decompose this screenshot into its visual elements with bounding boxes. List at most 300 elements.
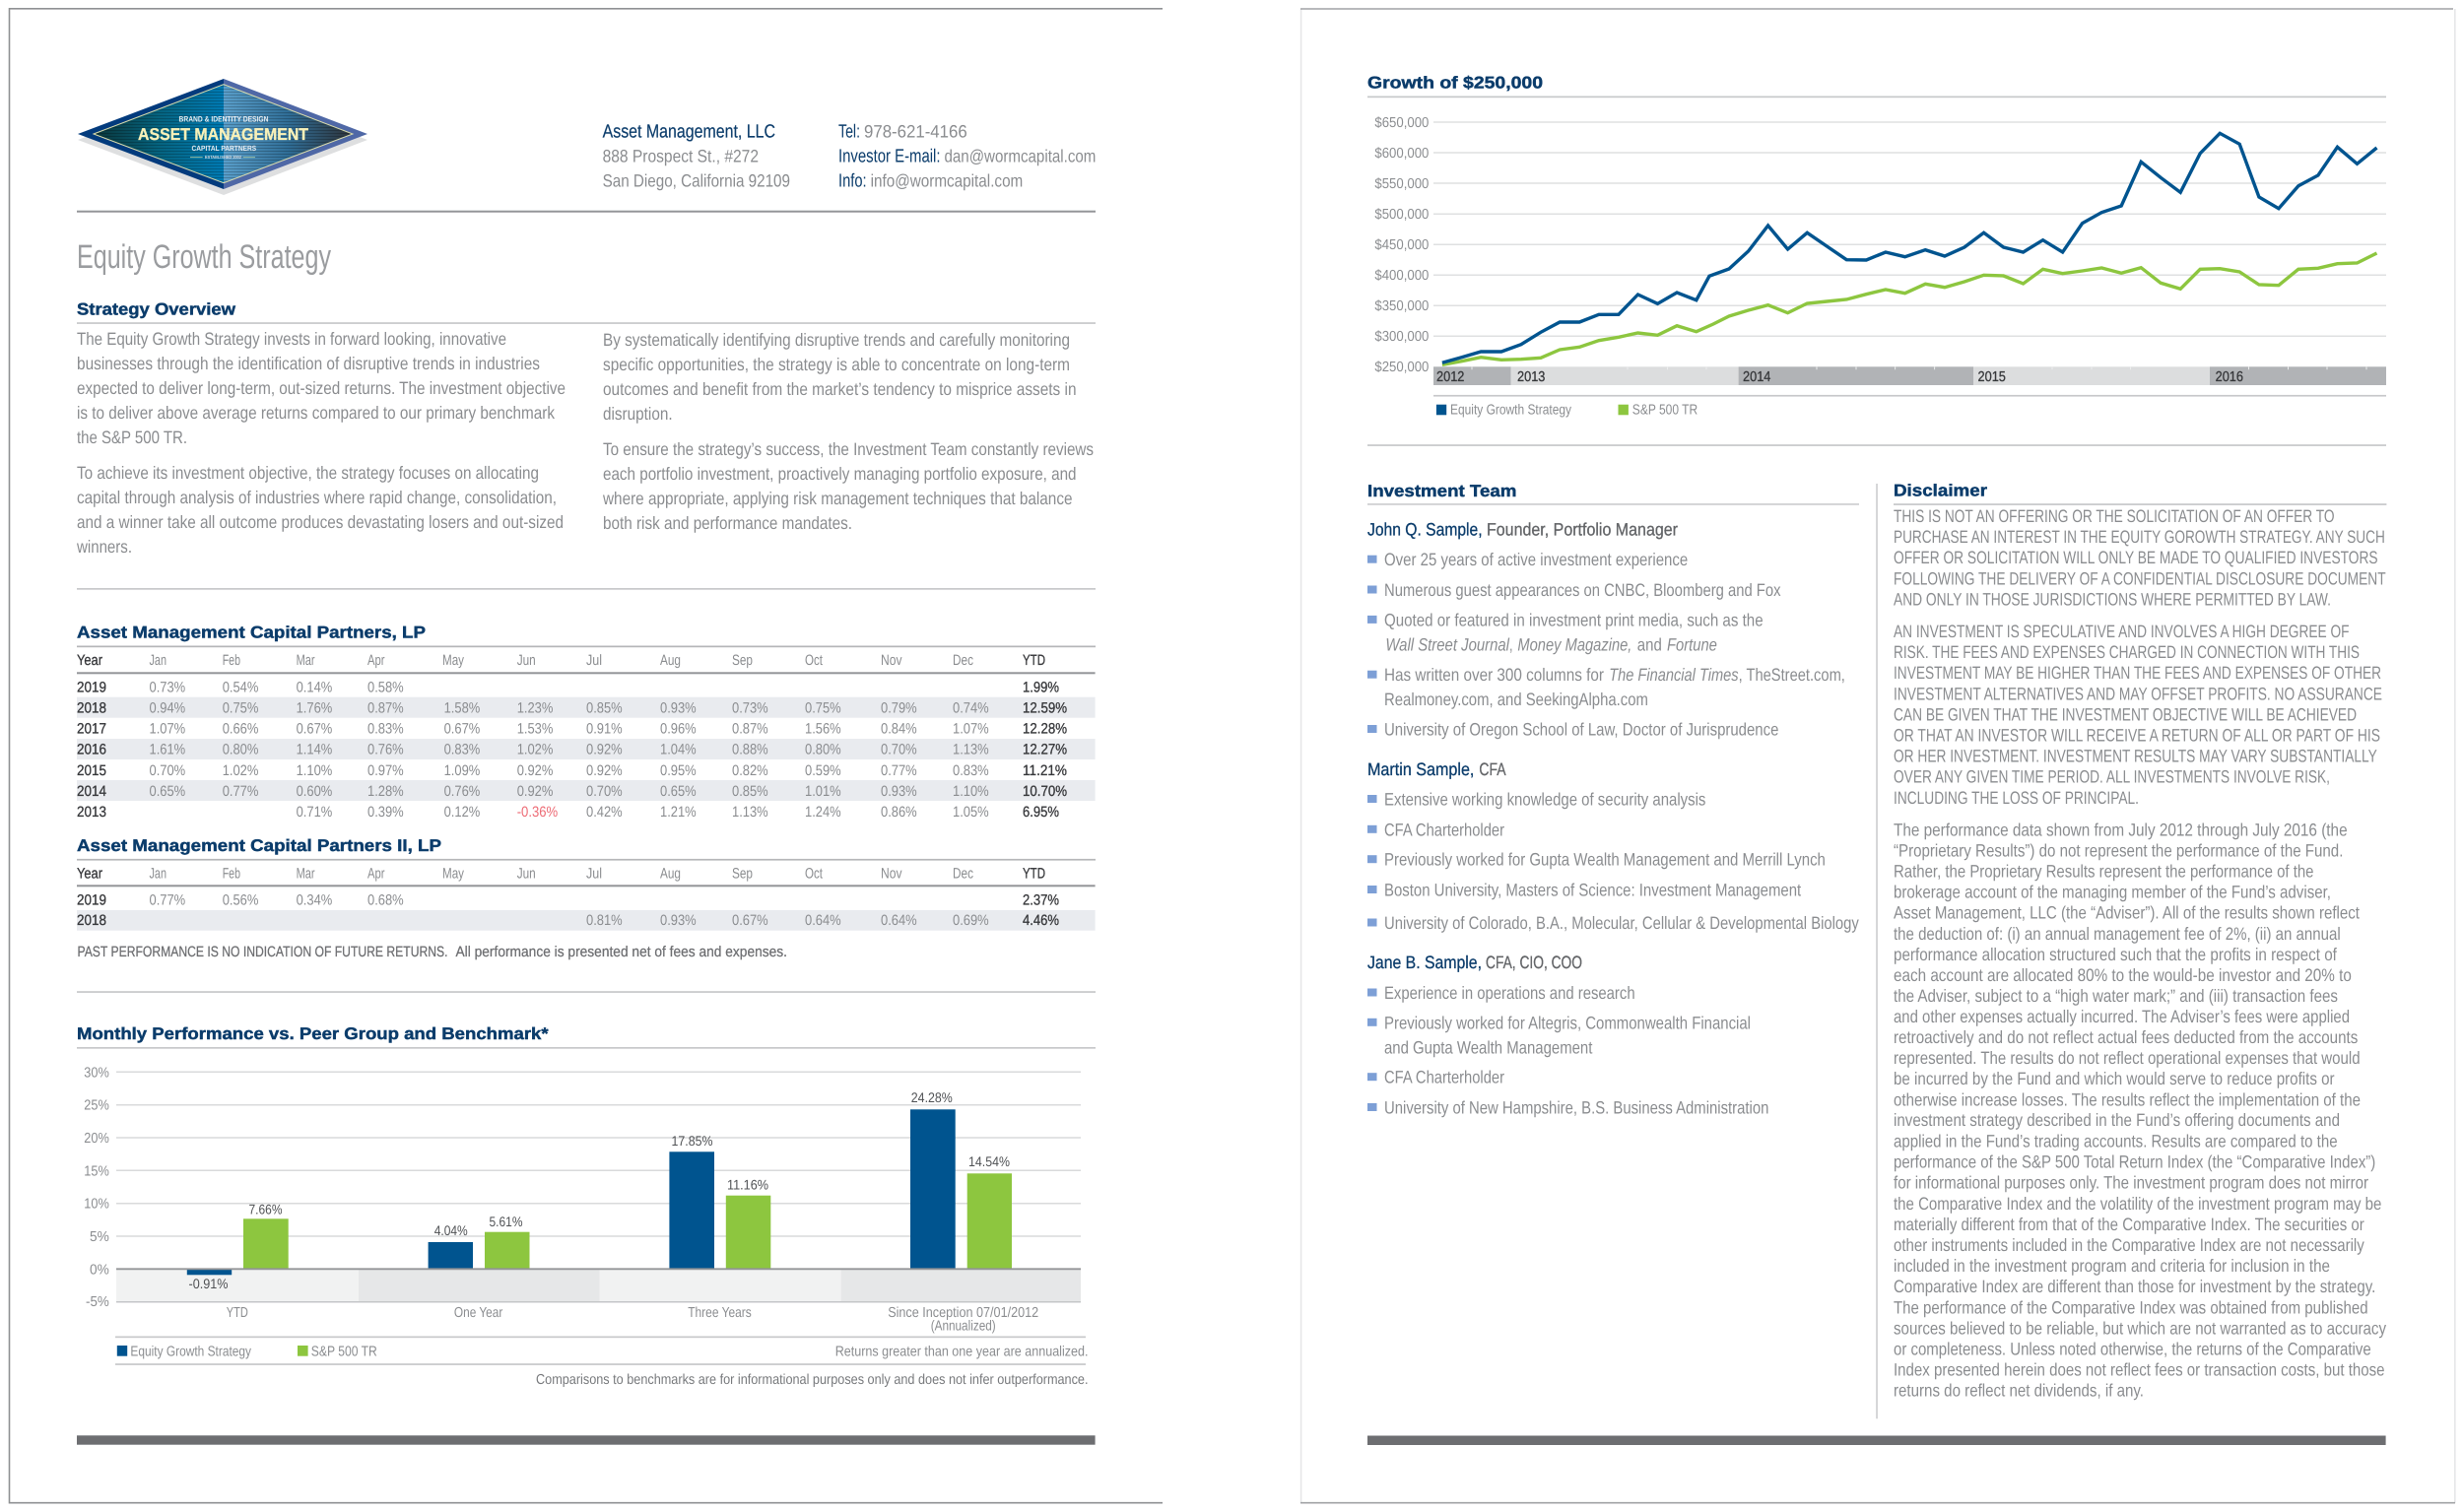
bars: one year: 4.04%	[434, 1222, 468, 1238]
row 2014: 0.70%	[586, 783, 623, 800]
note: benchmark comparison: Comparisons to benchmarks are for informational purposes only and does not infer outperformance.	[536, 1372, 1088, 1388]
text: overview left column: The Equity Growth Strategy invests in forward looking, innovative	[77, 329, 506, 349]
panel: monthly performance chart	[77, 1024, 1096, 1388]
team member: John Q. Sample: Over 25 years of active investment experience	[1384, 550, 1688, 569]
row 2019: 0.56%	[223, 891, 258, 908]
row 2014: 0.76%	[444, 783, 480, 800]
row 2017: 0.83%	[367, 721, 404, 737]
row 2013: 1.24%	[805, 804, 841, 821]
row 2018: 0.93%	[660, 699, 697, 716]
note: past performance: PAST PERFORMANCE IS NO INDICATION OF FUTURE RETURNS.	[77, 944, 447, 960]
row 2019: 2.37%	[1023, 891, 1059, 908]
category labels: YTD	[227, 1305, 248, 1321]
row 2014: 0.77%	[223, 783, 258, 800]
text: performance data notice: Comparative Index are different than those for investment by the strategy.	[1894, 1277, 2375, 1296]
row 2018: 2018	[77, 912, 106, 929]
text: performance data notice: performance allocation structured such that the profits in respect of	[1894, 945, 2338, 964]
row 2014: 0.92%	[517, 783, 553, 800]
row 2015: 0.92%	[517, 762, 553, 779]
row 2019	[77, 891, 1059, 908]
text: overview right column: where appropriate, applying risk management techniques that balance	[602, 489, 1072, 508]
row 2016: 1.04%	[660, 741, 697, 758]
team member: Jane B. Sample: and Gupta Wealth Management	[1384, 1038, 1592, 1058]
row 2018: 1.76%	[297, 699, 332, 716]
y axis labels: $500,000	[1374, 207, 1429, 223]
bars: since inception: 14.54%	[968, 1153, 1010, 1169]
text: performance data notice: brokerage account of the managing member of the Fund’s adviser,	[1894, 883, 2331, 902]
category labels	[227, 1305, 1038, 1334]
table header row: Mar	[297, 865, 315, 883]
team member: John Q. Sample: Numerous guest appearances on CNBC, Bloomberg and Fox	[1384, 580, 1781, 600]
table header row: May	[442, 652, 464, 669]
team member: John Q. Sample: Money Magazine,	[1517, 634, 1631, 654]
text: performance data notice: included in the investment program and criteria for inclusion in the	[1894, 1256, 2330, 1276]
team member: Martin Sample: CFA	[1479, 759, 1506, 779]
bars: since inception	[910, 1089, 1012, 1269]
row 2015: 0.97%	[367, 762, 404, 779]
text: performance data notice: the deduction of: (i) an annual management fee of 2%, (ii) an annual	[1894, 924, 2341, 944]
text: overview right column: By systematically identifying disruptive trends and carefully monitoring	[603, 330, 1070, 350]
panel: investment team	[1367, 482, 1859, 1117]
row 2015: 1.02%	[223, 762, 258, 779]
team member: Jane B. Sample	[1367, 953, 1768, 1117]
text: overview left column: winners.	[76, 537, 132, 557]
table header row: Feb	[223, 652, 240, 669]
text: overview left column: To achieve its investment objective, the strategy focuses on allocating	[77, 463, 539, 483]
text: risk notice: OVER ANY GIVEN TIME PERIOD. ALL INVESTMENTS INVOLVE RISK,	[1894, 766, 2330, 786]
row 2018: 0.74%	[953, 699, 989, 716]
row 2013: 1.05%	[953, 804, 989, 821]
bars: since inception: 24.28%	[911, 1089, 953, 1105]
team member: John Q. Sample: and	[1637, 634, 1662, 654]
row 2014: 0.65%	[150, 783, 185, 800]
table header row: Dec	[953, 865, 973, 883]
row 2014	[77, 783, 1067, 800]
row 2018: 0.85%	[586, 699, 623, 716]
note: past performance	[77, 944, 787, 960]
row 2015: 0.92%	[586, 762, 623, 779]
row 2014: 10.70%	[1023, 783, 1067, 800]
row 2014: 0.65%	[660, 783, 697, 800]
table header row: Jan	[150, 652, 166, 669]
panel: capital partners returns table	[77, 624, 1096, 821]
y axis labels: $650,000	[1374, 115, 1429, 131]
row 2017: 1.07%	[953, 721, 989, 737]
table header row: YTD	[1023, 865, 1045, 883]
text: performance data notice: for informational purposes only. The investment program does not mirror	[1894, 1173, 2368, 1193]
table header row: Jun	[517, 652, 536, 669]
text: performance data notice: the Adviser, subject to a “high water mark;” and (iii) transaction fees	[1894, 986, 2338, 1006]
legend: Equity Growth Strategy	[1450, 402, 1572, 418]
row 2017: 0.67%	[444, 721, 480, 737]
row 2017: 2017	[77, 721, 106, 737]
row 2018: 0.93%	[660, 912, 697, 929]
row 2015: 1.09%	[444, 762, 480, 779]
text: performance data notice: investment strategy described in the Fund’s offering documents and	[1894, 1110, 2340, 1130]
text: risk notice: INCLUDING THE LOSS OF PRINCIPAL.	[1894, 788, 2139, 808]
text: overview right column: both risk and performance mandates.	[603, 513, 852, 533]
table header row: Aug	[660, 652, 681, 669]
table header row: Nov	[881, 652, 902, 669]
text: performance data notice: applied in the Fund’s trading accounts. Results are compared to the	[1894, 1131, 2338, 1150]
contact: company address: San Diego, California 92109	[603, 171, 790, 191]
row 2018: 0.69%	[953, 912, 989, 929]
text: offering notice	[1894, 506, 2386, 609]
line: S&P 500 TR	[1442, 253, 2376, 364]
legend: S&P 500 TR	[311, 1344, 377, 1359]
table header row	[77, 865, 1045, 883]
text: performance data notice: Asset Management, LLC (the “Adviser”). All of the results shown reflect	[1894, 903, 2360, 923]
row 2017: 0.87%	[732, 721, 768, 737]
team member: Martin Sample: CFA Charterholder	[1384, 820, 1504, 839]
note: annualized returns: Returns greater than one year are annualized.	[835, 1344, 1088, 1359]
team member: Jane B. Sample: Jane B. Sample,	[1367, 953, 1482, 972]
row 2015: 1.10%	[297, 762, 332, 779]
row 2019: 0.73%	[150, 679, 185, 695]
table header row: Sep	[732, 652, 753, 669]
page title: Equity Growth Strategy	[77, 238, 331, 276]
row 2019: 2019	[77, 679, 106, 695]
row 2018: 0.73%	[732, 699, 768, 716]
heading: monthly performance: Monthly Performance vs. Peer Group and Benchmark*	[77, 1024, 549, 1043]
text: overview right column: each portfolio investment, proactively managing portfolio exposure, and	[603, 464, 1076, 484]
table header row	[77, 652, 1045, 669]
heading: capital partners: Asset Management Capital Partners, LP	[77, 624, 426, 642]
row 2013: -0.36%	[517, 804, 558, 821]
bars: three years: 17.85%	[672, 1133, 713, 1149]
bars: one year	[429, 1214, 530, 1269]
table header row: Jan	[150, 865, 166, 883]
text: performance data notice: the Comparative Index and the volatility of the investment program may be	[1894, 1194, 2381, 1214]
row 2014: 1.01%	[805, 783, 841, 800]
row 2016: 1.61%	[150, 741, 185, 758]
text: overview right column	[602, 330, 1094, 533]
text: performance data notice: Rather, the Proprietary Results represent the performance of the	[1894, 861, 2313, 881]
text: performance data notice: “Proprietary Results”) do not represent the performance of the Fund.	[1894, 841, 2343, 861]
text: offering notice: THIS IS NOT AN OFFERING OR THE SOLICITATION OF AN OFFER TO	[1894, 506, 2335, 526]
row 2019: 0.77%	[150, 891, 185, 908]
table header row: Apr	[367, 652, 385, 669]
row 2018: 0.67%	[732, 912, 768, 929]
row 2013: 1.21%	[660, 804, 697, 821]
team member: Jane B. Sample: Previously worked for Altegris, Commonwealth Financial	[1384, 1013, 1751, 1032]
contact: phone and email: dan@wormcapital.com	[944, 146, 1096, 165]
row 2016: 1.02%	[517, 741, 553, 758]
row 2016: 0.88%	[732, 741, 768, 758]
category labels: One Year	[454, 1305, 502, 1321]
text: performance data notice: other instruments included in the Comparative Index are not necessarily	[1894, 1235, 2364, 1255]
team member: John Q. Sample	[1367, 520, 1845, 739]
team member: John Q. Sample: Fortune	[1667, 634, 1717, 654]
y axis labels: 30%	[84, 1065, 109, 1081]
row 2017: 0.96%	[660, 721, 697, 737]
text: overview left column: capital through analysis of industries where rapid change, consolidation,	[77, 488, 557, 507]
y axis labels: 5%	[90, 1229, 109, 1245]
row 2018: 0.94%	[150, 699, 185, 716]
row 2015: 0.95%	[660, 762, 697, 779]
row 2019: 0.54%	[223, 679, 258, 695]
text: performance data notice	[1894, 821, 2386, 1401]
row 2015: 2015	[77, 762, 106, 779]
team member: Martin Sample: Extensive working knowledge of security analysis	[1384, 790, 1705, 810]
row 2013: 0.42%	[586, 804, 623, 821]
team member: John Q. Sample: Wall Street Journal	[1385, 634, 1510, 654]
team member: Martin Sample: University of Colorado, B.A., Molecular, Cellular & Developmental Biology	[1384, 913, 1859, 933]
row 2018: 0.81%	[586, 912, 623, 929]
row 2017: 1.56%	[805, 721, 841, 737]
row 2016: 2016	[77, 741, 106, 758]
year band: 2014	[1743, 369, 1770, 385]
row 2013: 1.13%	[732, 804, 768, 821]
y axis labels: $300,000	[1374, 329, 1429, 345]
table header row: Feb	[223, 865, 240, 883]
row 2014: 0.85%	[732, 783, 768, 800]
heading: strategy overview: Strategy Overview	[77, 299, 236, 319]
text: overview left column: businesses through the identification of disruptive trends in industries	[77, 354, 540, 373]
row 2018: 0.75%	[805, 699, 841, 716]
panel: disclaimer	[1894, 481, 2386, 1401]
y axis labels: $350,000	[1374, 298, 1429, 314]
row 2017: 0.91%	[586, 721, 623, 737]
text: performance data notice: or completeness. Unless noted otherwise, the returns of the Comparative	[1894, 1340, 2371, 1359]
y axis labels: $250,000	[1374, 360, 1429, 375]
heading: growth: Growth of $250,000	[1367, 73, 1543, 92]
row 2013: 2013	[77, 804, 106, 821]
text: performance data notice: otherwise increase losses. The results reflect the implementation of the	[1894, 1089, 2361, 1109]
team member: Martin Sample: Previously worked for Gupta Wealth Management and Merrill Lynch	[1384, 850, 1826, 870]
legend	[117, 1344, 377, 1359]
text: performance data notice: each account are allocated 80% to the would-be investor and 20% to	[1894, 965, 2352, 985]
text: performance data notice: be incurred by the Fund and which would serve to reduce profits or	[1894, 1069, 2335, 1088]
row 2013: 6.95%	[1023, 804, 1059, 821]
heading: investment team: Investment Team	[1367, 482, 1516, 500]
table header row: Jun	[517, 865, 536, 883]
text: risk notice	[1894, 622, 2382, 808]
row 2019: 2019	[77, 891, 106, 908]
y axis labels: $600,000	[1374, 146, 1429, 162]
row 2015	[77, 762, 1067, 779]
text: overview right column: To ensure the strategy’s success, the Investment Team constantly reviews	[603, 439, 1094, 459]
text: overview left column: the S&P 500 TR.	[77, 427, 187, 447]
row 2013: 0.12%	[444, 804, 480, 821]
row 2016	[77, 741, 1067, 758]
text: offering notice: AND ONLY IN THOSE JURISDICTIONS WHERE PERMITTED BY LAW.	[1894, 589, 2331, 609]
team member: Jane B. Sample: University of New Hampshire, B.S. Business Administration	[1384, 1097, 1768, 1117]
table header row: Oct	[805, 652, 824, 669]
y axis labels: 20%	[84, 1131, 109, 1147]
team member: John Q. Sample: Has written over 300 columns for	[1384, 665, 1604, 685]
row 2015: 0.70%	[150, 762, 185, 779]
year band	[1433, 366, 2386, 385]
table header row: Apr	[367, 865, 385, 883]
contact: phone and email: 978-621-4166	[864, 122, 967, 142]
table header row: May	[442, 865, 464, 883]
row 2018: 0.75%	[223, 699, 258, 716]
team member: John Q. Sample: ,	[1509, 634, 1513, 654]
row 2017: 0.84%	[881, 721, 917, 737]
contact: phone and email: Tel:	[838, 122, 860, 142]
year band: 2013	[1517, 369, 1545, 385]
row 2014: 0.60%	[297, 783, 332, 800]
bars: one year: 5.61%	[489, 1214, 522, 1229]
row 2017: 12.28%	[1023, 721, 1067, 737]
contact: company address	[603, 122, 790, 191]
text: performance data notice: retroactively and do not reflect actual fees deducted from the accounts	[1894, 1027, 2358, 1047]
panel: capital partners II returns table	[77, 836, 1096, 931]
page 2 frame	[1300, 9, 2455, 1503]
note: past performance: All performance is presented net of fees and expenses.	[455, 944, 787, 960]
row 2016: 12.27%	[1023, 741, 1067, 758]
contact: phone and email: info@wormcapital.com	[871, 171, 1023, 191]
table header row: Nov	[881, 865, 902, 883]
team member: John Q. Sample: Quoted or featured in investment print media, such as the	[1384, 610, 1764, 629]
team member: Martin Sample	[1367, 759, 1859, 933]
y axis labels: 10%	[84, 1197, 109, 1213]
year band: 2012	[1436, 369, 1464, 385]
team member: John Q. Sample: John Q. Sample,	[1367, 520, 1483, 540]
table header row: Sep	[732, 865, 753, 883]
page 1 frame	[10, 9, 1163, 1503]
row 2019: 1.99%	[1023, 679, 1059, 695]
panel: strategy overview	[76, 299, 1096, 557]
y axis labels	[84, 1065, 109, 1310]
team member: Jane B. Sample: CFA, CIO, COO	[1486, 953, 1582, 972]
row 2018: 0.64%	[805, 912, 841, 929]
bars: three years: 11.16%	[727, 1176, 768, 1192]
heading: capital partners II: Asset Management Capital Partners II, LP	[77, 836, 441, 855]
row 2014: 2014	[77, 783, 106, 800]
year band: 2015	[1978, 369, 2006, 385]
row 2018: 2018	[77, 699, 106, 716]
row 2018: 1.23%	[517, 699, 553, 716]
text: performance data notice: and other expenses actually incurred. The Adviser’s fees were applied	[1894, 1007, 2350, 1026]
table header row: YTD	[1023, 652, 1045, 669]
row 2014: 0.93%	[881, 783, 917, 800]
table header row: Jul	[586, 865, 602, 883]
team member: John Q. Sample: The Financial Times	[1609, 665, 1739, 685]
team member: Jane B. Sample: Experience in operations and research	[1384, 983, 1635, 1003]
text: performance data notice: materially different from that of the Comparative Index. The securities or	[1894, 1215, 2364, 1234]
row 2019: 0.34%	[297, 891, 332, 908]
panel: growth of 250000 chart	[1367, 73, 2386, 419]
heading: disclaimer: Disclaimer	[1894, 481, 1987, 499]
text: performance data notice: represented. The results do not reflect operational expenses that would	[1894, 1048, 2361, 1068]
row 2016: 0.80%	[223, 741, 258, 758]
legend	[1436, 402, 1697, 418]
row 2016: 0.92%	[586, 741, 623, 758]
row 2016: 0.70%	[881, 741, 917, 758]
bars: YTD	[187, 1202, 289, 1291]
y axis labels: $450,000	[1374, 237, 1429, 253]
table header row: Year	[77, 652, 102, 669]
row 2016: 1.14%	[297, 741, 332, 758]
contact: phone and email	[838, 122, 1096, 191]
team member: Martin Sample: Martin Sample,	[1367, 759, 1474, 779]
text: performance data notice: performance of the S&P 500 Total Return Index (the “Comparative Index”)	[1894, 1152, 2375, 1172]
text: performance data notice: The performance of the Comparative Index was obtained from published	[1894, 1297, 2368, 1317]
row 2018: 0.87%	[367, 699, 404, 716]
row 2015: 11.21%	[1023, 762, 1067, 779]
row 2013: 0.86%	[881, 804, 917, 821]
logo: asset management diamond: CAPITAL PARTNERS	[191, 144, 256, 153]
table header row: Jul	[586, 652, 602, 669]
row 2015: 0.59%	[805, 762, 841, 779]
row 2019: 0.68%	[367, 891, 404, 908]
row 2015: 0.83%	[953, 762, 989, 779]
row 2014: 1.10%	[953, 783, 989, 800]
text: overview right column: outcomes and benefit from the market’s tendency to misprice assets in	[603, 379, 1076, 399]
category labels: Since Inception 07/01/2012	[888, 1305, 1038, 1321]
bars: YTD: -0.91%	[189, 1276, 229, 1291]
row 2014: 1.28%	[367, 783, 404, 800]
row 2017: 1.53%	[517, 721, 553, 737]
year band: 2016	[2216, 369, 2243, 385]
y axis labels: 0%	[90, 1262, 109, 1278]
row 2015: 0.77%	[881, 762, 917, 779]
y axis labels: $400,000	[1374, 268, 1429, 284]
row 2019	[77, 679, 1059, 695]
row 2017: 1.07%	[150, 721, 185, 737]
row 2018	[77, 912, 1059, 929]
contact: phone and email: Investor E-mail:	[838, 146, 940, 167]
row 2016: 0.80%	[805, 741, 841, 758]
row 2013	[77, 804, 1059, 821]
row 2017: 0.67%	[297, 721, 332, 737]
team member: Jane B. Sample: CFA Charterholder	[1384, 1068, 1504, 1087]
table header row: Oct	[805, 865, 824, 883]
logo: asset management diamond: BRAND & IDENTITY DESIGN	[179, 114, 269, 124]
row 2018: 1.58%	[444, 699, 480, 716]
row 2015: 0.82%	[732, 762, 768, 779]
row 2019: 0.14%	[297, 679, 332, 695]
y axis labels: 25%	[84, 1098, 109, 1114]
text: overview left column: expected to deliver long-term, out-sized returns. The investment objective	[77, 378, 566, 398]
row 2016: 0.83%	[444, 741, 480, 758]
table header row: Dec	[953, 652, 973, 669]
row 2013: 0.39%	[367, 804, 404, 821]
y axis labels: 15%	[84, 1163, 109, 1179]
category labels: (Annualized)	[931, 1318, 996, 1334]
y axis labels	[1374, 115, 1429, 375]
row 2018	[77, 699, 1067, 716]
logo: asset management diamond: ASSET MANAGEMENT	[138, 125, 309, 144]
category labels: Three Years	[688, 1305, 752, 1321]
row 2018: 0.64%	[881, 912, 917, 929]
text: overview right column: specific opportunities, the strategy is able to concentrate on long-term	[603, 355, 1070, 374]
chart bands below zero	[116, 1269, 1081, 1302]
text: overview left column: is to deliver above average returns compared to our primary benchmark	[77, 403, 556, 423]
y axis labels: -5%	[86, 1294, 109, 1310]
text: overview right column: disruption.	[603, 404, 673, 424]
table header row: Mar	[297, 652, 315, 669]
bars: three years	[669, 1133, 770, 1269]
logo: asset management diamond: ESTABLISHED 2002	[205, 155, 241, 160]
contact: company address: 888 Prospect St., #272	[603, 146, 759, 165]
contact: company address: Asset Management, LLC	[603, 122, 775, 142]
contact: phone and email: Info:	[838, 171, 867, 191]
bars: YTD: 7.66%	[248, 1202, 282, 1217]
y axis labels: $550,000	[1374, 176, 1429, 192]
table header row: Year	[77, 865, 102, 883]
row 2016: 1.13%	[953, 741, 989, 758]
row 2019: 0.58%	[367, 679, 404, 695]
legend: Equity Growth Strategy	[130, 1344, 252, 1359]
line: equity growth strategy	[1442, 133, 2376, 362]
row 2018: 12.59%	[1023, 699, 1067, 716]
team member: John Q. Sample: University of Oregon School of Law, Doctor of Jurisprudence	[1384, 719, 1778, 739]
row 2017	[77, 721, 1067, 737]
team member: John Q. Sample: Founder, Portfolio Manager	[1487, 520, 1678, 540]
